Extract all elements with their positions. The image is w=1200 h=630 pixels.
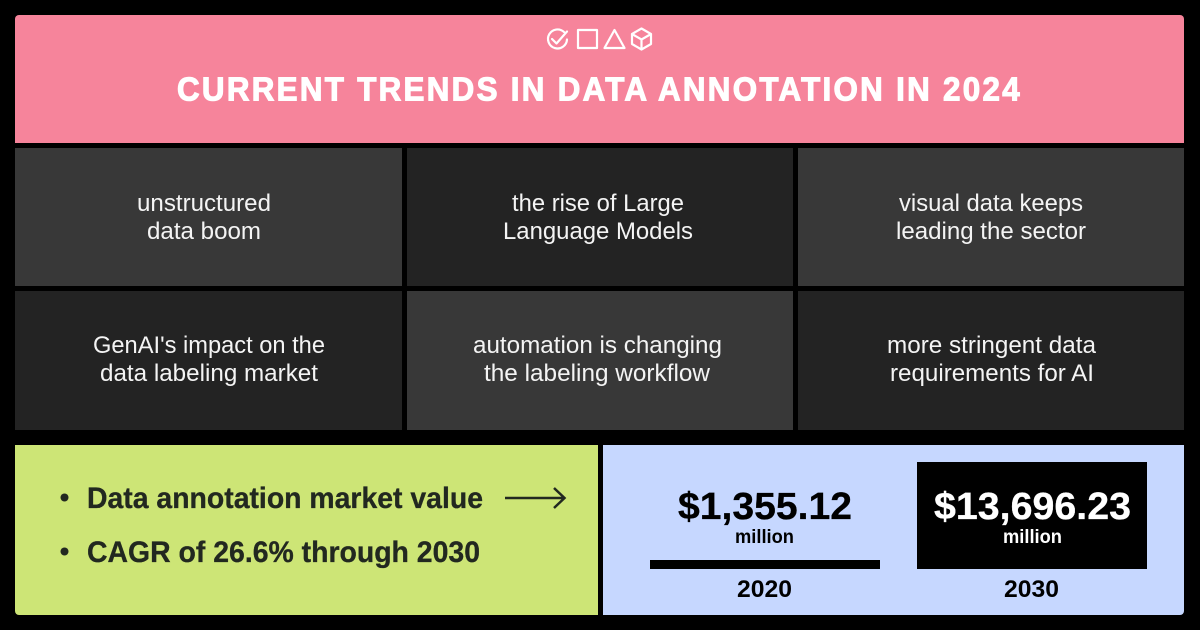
panel: the rise of Large Language Models: Language Models xyxy=(503,218,693,245)
panel: automation is changing the labeling workflow xyxy=(407,291,793,430)
panel: more stringent data requirements for AI xyxy=(798,291,1184,430)
panel: automation is changing the labeling workflow: automation is changing xyxy=(473,332,722,359)
panel: header xyxy=(15,15,1184,143)
bar 2020 xyxy=(650,560,880,569)
panel: unstructured data boom: unstructured xyxy=(137,190,271,217)
panel: GenAI's impact on the data labeling market: GenAI's impact on the xyxy=(93,332,325,359)
value 2020: million xyxy=(735,527,794,548)
panel: more stringent data requirements for AI: more stringent data xyxy=(887,332,1096,359)
panel: automation is changing the labeling workflow: the labeling workflow xyxy=(484,360,710,387)
label 2020: 2020 xyxy=(737,576,792,603)
panel: unstructured data boom: data boom xyxy=(147,218,261,245)
panel: the rise of Large Language Models: the rise of Large xyxy=(512,190,684,217)
icons: annotation shapes xyxy=(548,28,651,50)
bar 2030 with value: million xyxy=(1003,527,1062,548)
panel: market summary xyxy=(15,445,598,615)
arrow xyxy=(505,488,564,508)
value 2020: $1,355.12 xyxy=(678,486,852,528)
panel: GenAI's impact on the data labeling market: data labeling market xyxy=(100,360,318,387)
bullet: market value: Data annotation market value xyxy=(87,482,483,515)
title: CURRENT TRENDS IN DATA ANNOTATION IN 2024 xyxy=(177,71,1020,108)
panel: unstructured data boom xyxy=(15,148,402,286)
panel: visual data keeps leading the sector xyxy=(798,148,1184,286)
panel: visual data keeps leading the sector: visual data keeps xyxy=(899,190,1083,217)
bar 2030 with value: $13,696.23 xyxy=(934,486,1131,528)
panel: the rise of Large Language Models xyxy=(407,148,793,286)
panel: GenAI's impact on the data labeling market xyxy=(15,291,402,430)
bullet: CAGR: CAGR of 26.6% through 2030 xyxy=(87,536,480,569)
panel: market value chart xyxy=(603,445,1184,615)
label 2030: 2030 xyxy=(1004,576,1059,603)
bar 2030 with value xyxy=(917,462,1147,569)
panel: more stringent data requirements for AI: requirements for AI xyxy=(890,360,1094,387)
value 2020 xyxy=(678,486,852,548)
panel: visual data keeps leading the sector: leading the sector xyxy=(896,218,1086,245)
